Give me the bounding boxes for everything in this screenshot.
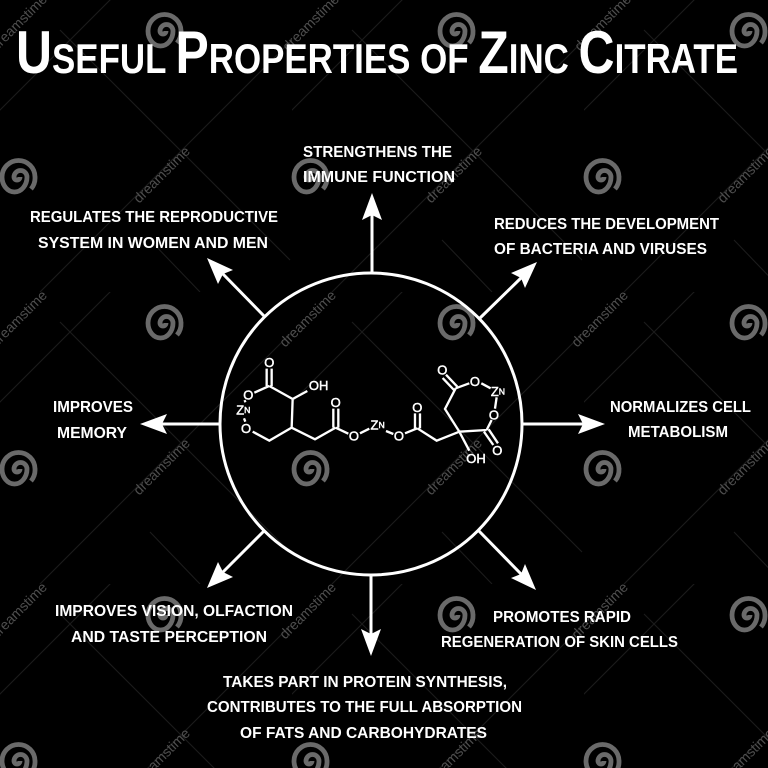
label: protein synthesis: CONTRIBUTES TO THE FULL ABSORPTION <box>207 699 522 716</box>
watermark text: dreamstime <box>568 579 631 642</box>
label: immune function: IMMUNE FUNCTION <box>303 169 455 186</box>
molecule atom labels: O <box>437 362 447 377</box>
watermark text: dreamstime <box>130 435 193 498</box>
molecule atom labels: O <box>241 421 251 436</box>
molecule atom labels: O <box>331 395 341 410</box>
label: reproductive system: SYSTEM IN WOMEN AND MEN <box>38 235 268 252</box>
label: skin regeneration: REGENERATION OF SKIN CELLS <box>441 634 678 651</box>
arrow: south-east <box>478 530 536 590</box>
molecule bonds <box>244 369 498 451</box>
watermark text: dreamstime <box>568 287 631 350</box>
molecule atom labels: O <box>394 428 404 443</box>
molecule atom labels: O <box>412 400 422 415</box>
arrow: south-west <box>207 530 265 588</box>
label: bacteria and viruses: REDUCES THE DEVELOPMENT <box>494 216 719 233</box>
arrow: up <box>362 193 382 272</box>
molecule atom labels: O <box>489 407 499 422</box>
molecule atom labels: OH <box>466 451 486 466</box>
molecule atom labels: O <box>243 387 253 402</box>
label: protein synthesis: TAKES PART IN PROTEIN SYNTHESIS, <box>223 674 507 691</box>
molecule atom labels: OH <box>309 378 328 393</box>
label: vision olfaction taste: AND TASTE PERCEPTION <box>71 629 267 646</box>
watermark text: dreamstime <box>130 143 193 206</box>
arrow: right <box>522 414 605 434</box>
label: cell metabolism: NORMALIZES CELL <box>610 399 751 416</box>
molecule atom labels: O <box>264 355 274 370</box>
label: reproductive system: REGULATES THE REPRODUCTIVE <box>30 209 278 226</box>
watermark text: dreamstime <box>422 143 485 206</box>
molecule atom labels: O <box>349 428 359 443</box>
watermark text: dreamstime <box>422 435 485 498</box>
title: USEFUL PROPERTIES OF ZINC CITRATE <box>16 19 738 86</box>
label: vision olfaction taste: IMPROVES VISION, OLFACTION <box>55 603 293 620</box>
label: bacteria and viruses <box>494 216 719 258</box>
label: skin regeneration: PROMOTES RAPID <box>493 609 631 626</box>
watermark text: dreamstime <box>276 579 339 642</box>
molecule atom labels: ZN <box>491 384 505 399</box>
central circle <box>220 273 522 575</box>
label: immune function: STRENGTHENS THE <box>303 144 452 161</box>
zinc citrate molecule <box>236 355 505 466</box>
arrow: north-west <box>207 258 265 317</box>
label: protein synthesis: OF FATS AND CARBOHYDRATES <box>240 725 487 742</box>
label: reproductive system <box>30 209 278 252</box>
label: memory: IMPROVES <box>53 399 133 416</box>
label: memory: MEMORY <box>57 425 127 442</box>
molecule atom labels: O <box>492 443 502 458</box>
label: cell metabolism <box>610 399 751 441</box>
label: skin regeneration <box>441 609 678 651</box>
molecule atom labels <box>236 355 505 466</box>
label: cell metabolism: METABOLISM <box>628 424 728 441</box>
molecule atom labels: ZN <box>371 417 385 432</box>
arrow: down <box>361 575 381 656</box>
molecule atom labels: O <box>470 374 480 389</box>
label: protein synthesis <box>207 674 522 742</box>
label: immune function <box>303 144 455 186</box>
watermark text: dreamstime <box>276 287 339 350</box>
label: vision olfaction taste <box>55 603 293 646</box>
molecule atom labels: ZN <box>236 402 250 417</box>
label: memory <box>53 399 133 442</box>
arrow: left <box>140 414 220 434</box>
arrow: north-east <box>479 262 537 319</box>
label: bacteria and viruses: OF BACTERIA AND VIRUSES <box>494 241 707 258</box>
